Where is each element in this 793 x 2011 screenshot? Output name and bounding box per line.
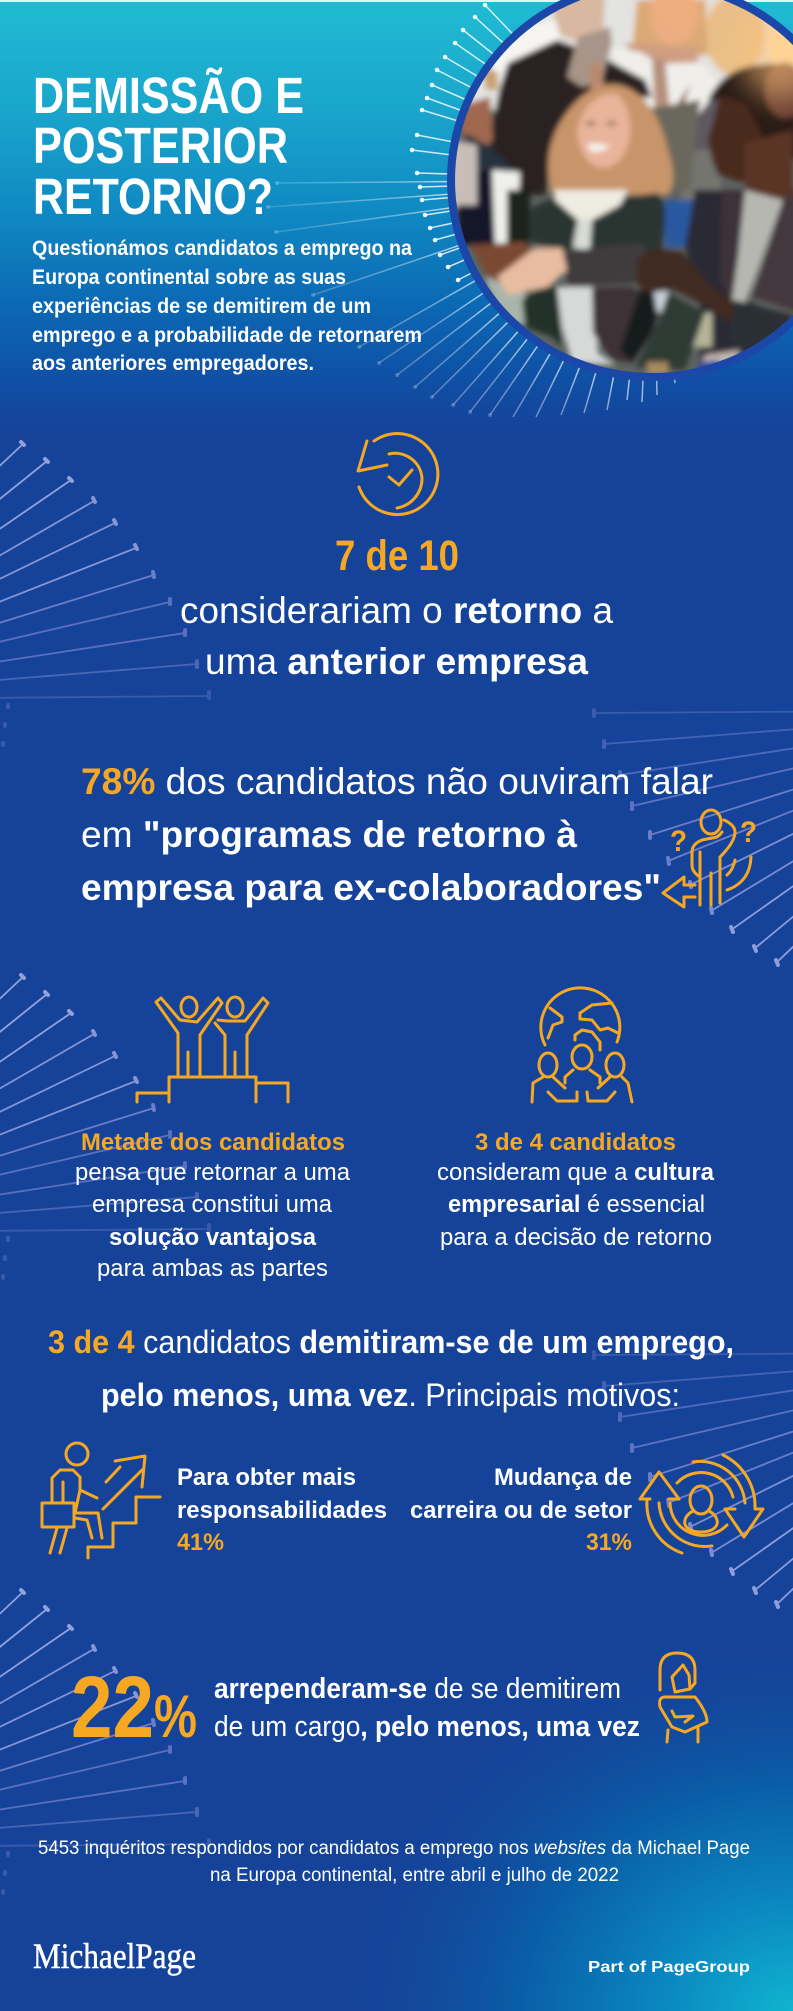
icon: questioning person: ?	[670, 825, 687, 858]
icon: people on podium	[137, 997, 288, 1102]
footnote	[38, 1838, 750, 1886]
heading: 3 de 4 candidatos demitiram-se	[48, 1324, 734, 1413]
panel: mais responsabilidades: Para obter mais	[177, 1464, 356, 1491]
stat: 22%: arrependeram-se de se demitirem	[214, 1673, 621, 1705]
panel: metade dos candidatos: solução vantajosa	[109, 1224, 317, 1251]
panel: mais responsabilidades	[42, 1443, 387, 1558]
heading: 3 de 4 candidatos demitiram-se: 3 de 4 candidatos demitiram-se de um emprego,	[48, 1324, 734, 1360]
panel: metade dos candidatos: para ambas as partes	[97, 1255, 328, 1282]
stat: 78%: em "programas de retorno à	[81, 814, 577, 855]
panel: metade dos candidatos: pensa que retornar a uma	[75, 1159, 351, 1186]
stat: 22%	[71, 1653, 707, 1756]
icon: questioning person	[663, 810, 757, 907]
icon: globe and people	[532, 988, 632, 1102]
part of PageGroup: Part of PageGroup	[588, 1959, 750, 1976]
footnote: 5453 inquéritos respondidos por candidatos a emprego nos websites da Michael Page	[38, 1838, 750, 1859]
panel: mais responsabilidades: responsabilidades	[177, 1497, 387, 1524]
panel: cultura empresarial	[437, 988, 715, 1251]
icon: career cycle	[640, 1455, 763, 1553]
title: POSTERIOR	[33, 117, 288, 174]
footnote: na Europa continental, entre abril e julho de 2022	[210, 1865, 619, 1886]
stat: 7 de 10: 7 de 10	[335, 532, 459, 580]
icon: clock with return arrow	[358, 434, 438, 515]
panel: cultura empresarial: empresarial é essencial	[448, 1191, 705, 1218]
title: RETORNO?	[33, 168, 273, 225]
panel: mais responsabilidades: 41%	[177, 1529, 224, 1556]
stat: 22%: %	[154, 1683, 197, 1750]
title: DEMISSÃO E	[33, 66, 304, 124]
intro paragraph	[32, 237, 422, 375]
intro paragraph: Questionámos candidatos a emprego na	[32, 237, 412, 260]
icon: woman at desk	[660, 1653, 707, 1742]
panel: mudança de carreira: 31%	[586, 1529, 632, 1556]
intro paragraph: Europa continental sobre as suas	[32, 266, 346, 289]
panel: mudança de carreira: Mudança de	[494, 1464, 632, 1491]
intro paragraph: emprego e a probabilidade de retornarem	[32, 324, 422, 347]
stat: 7 de 10: considerariam o retorno a	[180, 590, 613, 631]
panel: cultura empresarial: para a decisão de retorno	[440, 1224, 712, 1251]
icon: questioning person: ?	[740, 816, 757, 849]
stat: 7 de 10	[180, 532, 613, 682]
logo: Michael Page: MichaelPage	[33, 1936, 196, 1976]
panel: cultura empresarial: 3 de 4 candidatos	[475, 1129, 676, 1156]
stat: 7 de 10: uma anterior empresa	[205, 641, 588, 682]
decorative ray bursts	[0, 442, 793, 1893]
panel: cultura empresarial: consideram que a cultura	[437, 1159, 715, 1186]
stat: 78%	[81, 761, 713, 908]
heading: 3 de 4 candidatos demitiram-se: pelo menos, uma vez. Principais motivos:	[101, 1377, 680, 1413]
stat: 22%: de um cargo, pelo menos, uma vez	[214, 1711, 640, 1743]
stat: 22%: 22	[71, 1659, 154, 1756]
panel: metade dos candidatos: Metade dos candidatos	[81, 1129, 345, 1156]
photo: people shaking hands in a circle	[440, 0, 793, 400]
title	[33, 66, 304, 225]
intro paragraph: experiências de se demitirem de um	[32, 295, 371, 318]
panel: metade dos candidatos	[75, 997, 351, 1282]
panel: mudança de carreira	[410, 1455, 763, 1556]
panel: metade dos candidatos: empresa constitui uma	[92, 1191, 333, 1218]
stat: 78%: empresa para ex-colaboradores"	[81, 867, 661, 908]
panel: mudança de carreira: carreira ou de setor	[410, 1497, 632, 1524]
intro paragraph: aos anteriores empregadores.	[32, 352, 314, 375]
header ray burst around photo	[268, 5, 675, 417]
stat: 78%: 78% dos candidatos não ouviram falar	[81, 761, 713, 802]
icon: person climbing stairs	[42, 1443, 160, 1558]
